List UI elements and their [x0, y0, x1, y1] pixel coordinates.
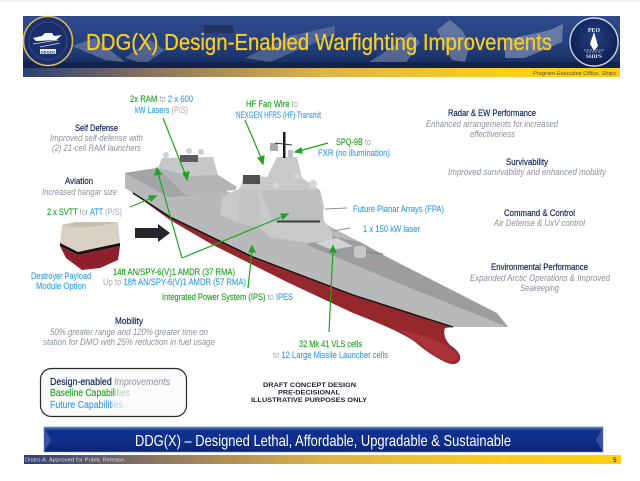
icon: DDG(X) seal — [24, 16, 72, 66]
callout: VLS cells: to 12 Large Missile Launcher cells — [273, 349, 388, 360]
text block: environmental performance: Expanded Arctic Operations & Improved — [470, 272, 611, 283]
text block: environmental performance: Seakeeping — [520, 282, 560, 293]
text block: environmental performance — [470, 261, 611, 293]
callout: integrated power system: Integrated Power System (IPS) to IPES — [162, 291, 293, 302]
text block: command and control: Air Defense & UxV control — [493, 217, 586, 228]
program office text: Program Executive Office, Ships — [533, 71, 616, 77]
legend: Future Capabilities — [50, 400, 123, 411]
bottom banner — [44, 427, 603, 452]
top stripe — [0, 0, 640, 2]
callout: destroyer payload module option: Module Option — [36, 280, 86, 291]
text block: command and control: Command & Control — [504, 207, 575, 218]
gun turret — [354, 246, 383, 258]
callout: future planar arrays: Future Planar Arrays (FPA) — [353, 203, 444, 214]
text block: radar and EW — [426, 107, 559, 139]
header ships imagery — [23, 20, 620, 68]
text block: survivability — [448, 156, 607, 177]
icon: PEO Ships seal: SHIPS — [586, 54, 602, 60]
callout: laser: 1 x 150 kW laser — [363, 223, 420, 234]
text block: draft concept notice: ILLUSTRATIVE PURPOSES ONLY — [251, 397, 368, 404]
header banner — [23, 16, 620, 77]
gray leader lines — [325, 208, 350, 231]
footer bar: Distro A: Approved for Public Release. — [25, 458, 127, 464]
text block: draft concept notice — [251, 382, 368, 404]
icon: DDG(X) seal: DDG(X) — [41, 50, 56, 54]
text block: draft concept notice: PRE-DECISIONAL — [278, 390, 340, 396]
icon: PEO Ships seal: PEO — [588, 28, 600, 34]
text block: command and control — [493, 207, 586, 228]
ship hull red — [133, 193, 460, 364]
text block: aviation: Increased hangar size — [42, 186, 117, 197]
text block: radar and EW: effectiveness — [470, 128, 515, 139]
callout: HF fan wire — [236, 98, 321, 120]
icon: PEO Ships seal — [570, 18, 618, 66]
callout: SPQ-9B — [318, 136, 390, 158]
footer bar: 5 — [613, 457, 617, 464]
callout: SPQ-9B: SPQ-9B to — [336, 136, 371, 147]
legend — [40, 368, 186, 416]
callout: RAM to lasers: 2x RAM to 2 x 600 — [130, 93, 193, 104]
callout: RAM to lasers — [130, 93, 193, 115]
callout: RAM to lasers: kW Lasers (P/S) — [135, 104, 188, 115]
callout: destroyer payload module option — [31, 270, 91, 291]
text block: mobility: 50% greater range and 120% greater time on — [50, 326, 208, 337]
text block: aviation: Aviation — [65, 175, 93, 186]
text block: mobility: Mobility — [115, 315, 143, 326]
text block: survivability: Improved survivability and enhanced mobility — [448, 166, 607, 177]
icon: destroyer payload module — [60, 222, 120, 270]
text block: draft concept notice: DRAFT CONCEPT DESIGN — [263, 382, 356, 389]
callout: SVTT: 2 x SVTT for ATT (P/S) — [47, 206, 122, 217]
callout: HF fan wire: NEXGEN HFRS (HF) Transmit — [236, 109, 321, 120]
title: DDG(X) Design-Enabled Warfighting Improvements — [86, 29, 552, 55]
text block: self defense: Self Defense — [75, 122, 118, 133]
callout: AMDR radar: Up to 18ft AN/SPY-6(V)1 AMDR (57 RMA) — [103, 276, 246, 287]
callout: AMDR radar: 14ft AN/SPY-6(V)1 AMDR (37 RMA) — [113, 266, 235, 277]
text block: environmental performance: Environmental Performance — [491, 261, 588, 272]
text block: radar and EW: Radar & EW Performance — [448, 107, 536, 118]
text block: radar and EW: Enhanced arrangements for increased — [426, 118, 559, 129]
footer bar — [24, 455, 621, 464]
header gold band — [23, 68, 620, 77]
icon: black arrow — [135, 224, 170, 242]
hangar block — [158, 157, 237, 195]
ship illustration — [125, 132, 508, 364]
legend: Design-enabled Improvements — [50, 377, 170, 388]
arrows: green leaders — [130, 118, 336, 332]
callout: AMDR radar — [103, 266, 246, 287]
callout: VLS cells: 32 Mk 41 VLS cells — [299, 338, 362, 349]
text block: self defense: Improved self-defense with — [50, 132, 143, 143]
text block: mobility: station for DMO with 25% reduction in fuel usage — [43, 336, 215, 347]
text block: mobility — [43, 315, 215, 347]
callout: destroyer payload module option: Destroyer Payload — [31, 270, 91, 281]
legend: Baseline Capabilities — [50, 388, 130, 399]
mast — [270, 132, 293, 158]
callout: VLS cells — [273, 338, 388, 360]
text block: aviation — [42, 175, 117, 197]
ship foredeck — [307, 235, 508, 327]
text block: self defense: (2) 21-cell RAM launchers — [52, 142, 141, 153]
VLS deck patch — [315, 238, 353, 250]
bottom banner: DDG(X) – Designed Lethal, Affordable, Upgradable & Sustainable — [135, 433, 511, 450]
text block: self defense — [50, 122, 143, 153]
ship aft deck — [125, 168, 190, 197]
main deckhouse — [220, 157, 333, 243]
callout: SPQ-9B: FXR (no illumination) — [318, 147, 390, 158]
callout: HF fan wire: HF Fan Wire to — [246, 98, 298, 109]
text block: survivability: Survivability — [506, 156, 548, 167]
ship hull side — [125, 168, 508, 327]
